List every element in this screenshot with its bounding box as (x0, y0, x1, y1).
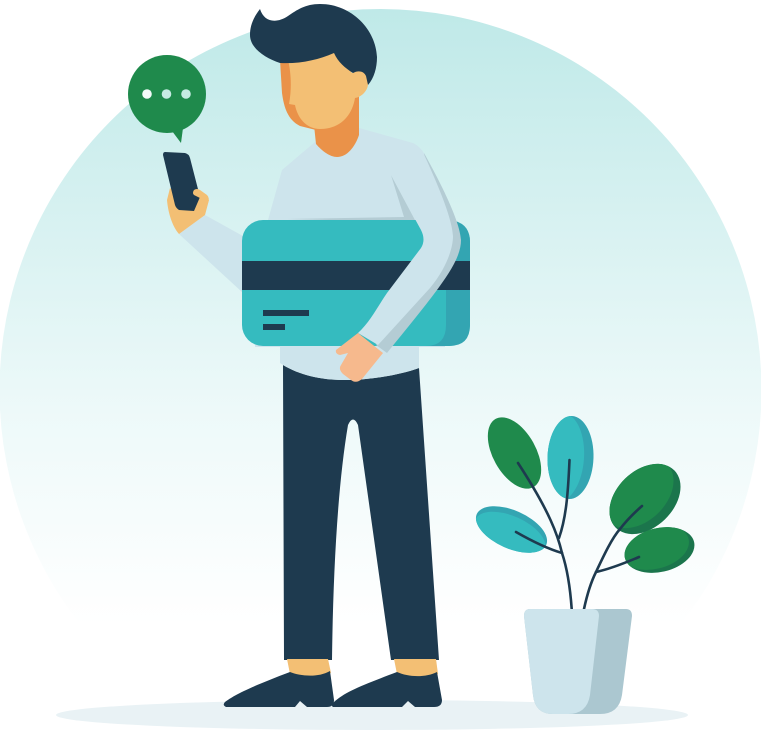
leaf: right lower green (624, 527, 694, 573)
speech bubble (128, 55, 206, 143)
thumb (193, 189, 209, 210)
leaf: top left green (477, 408, 552, 498)
face (288, 50, 368, 129)
hair (250, 4, 377, 85)
right hand (336, 333, 383, 382)
card text lines (263, 310, 309, 330)
left hand (167, 188, 209, 234)
trousers (283, 365, 439, 660)
shoe left (224, 671, 334, 707)
leaf: left teal (476, 506, 548, 553)
arm shadow (376, 153, 461, 353)
bubble tail (172, 128, 183, 143)
leaf: top centre teal (547, 416, 594, 499)
phone (163, 152, 200, 211)
plant stems (516, 460, 642, 609)
ankles (287, 659, 438, 680)
arm left sleeve (179, 215, 250, 292)
right arm sleeve (358, 150, 453, 345)
man (128, 4, 470, 707)
card shaded edge (426, 290, 470, 346)
card magnetic stripe (242, 261, 470, 290)
plant (468, 408, 700, 714)
plant pot (524, 609, 632, 714)
head back (280, 60, 320, 130)
sweater fold shadow (287, 175, 416, 222)
credit card (242, 220, 470, 346)
bubble dots (142, 89, 152, 99)
ground shadow (56, 700, 688, 730)
leaf: right upper green (609, 464, 680, 534)
sweater body (255, 128, 445, 380)
neck (314, 92, 359, 157)
shoe right (332, 672, 442, 707)
